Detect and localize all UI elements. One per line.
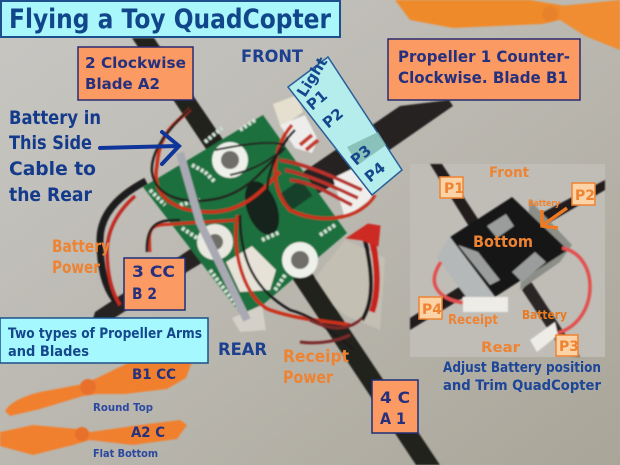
propeller labels: A2 C (131, 425, 165, 441)
black and red wires (100, 109, 380, 350)
inset arrow: battery (542, 208, 567, 228)
panel: propeller types heading: and Blades (8, 344, 89, 360)
inset tag: P3: P3 (559, 339, 579, 355)
label: battery power: Battery (52, 237, 110, 257)
inset tag: P1 (440, 177, 464, 198)
panel: propeller types heading: Two types of Propeller Arms (8, 326, 202, 342)
text block: battery note: Cable to (9, 158, 96, 180)
black chips (238, 177, 286, 239)
black propeller arm: top-left to bottom-right (132, 38, 440, 465)
white screw mount 2 (197, 224, 233, 260)
propeller labels: Flat Bottom (93, 447, 158, 460)
text block: battery note (9, 107, 101, 206)
callout: 3 CC B 2 (124, 258, 185, 310)
callout: 4 C A 1: 4 C (380, 388, 410, 407)
callout: 3 CC B 2: B 2 (132, 284, 157, 303)
callout: blade A2 (78, 47, 193, 100)
inset tag: P2 (572, 183, 595, 205)
label: receipt power: Receipt (283, 347, 349, 367)
inset tag: P2: P2 (575, 188, 595, 204)
white connectors (273, 95, 303, 128)
battery foam under board (310, 240, 385, 330)
rotated pin label panel (288, 54, 402, 195)
callout: propeller 1: Propeller 1 Counter- (398, 47, 570, 66)
callout: propeller 1 (388, 39, 580, 100)
label: REAR: REAR (218, 340, 267, 360)
callout: 4 C A 1 (372, 380, 418, 433)
label: battery power: Power (52, 258, 100, 278)
lower propeller type B1 CC (5, 362, 192, 416)
caption: adjust battery (443, 360, 601, 394)
circuit board (143, 95, 375, 332)
caption: adjust battery: and Trim QuadCopter (443, 378, 601, 394)
label: receipt power (283, 347, 349, 388)
inset label: Rear: Rear (481, 340, 520, 356)
propeller labels: Round Top (93, 401, 153, 414)
callout: 3 CC B 2: 3 CC (132, 262, 175, 281)
panel: propeller types heading (0, 318, 208, 363)
rotated pin label panel: P1 (303, 86, 331, 114)
rotated pin label panel: P2 (319, 104, 347, 132)
rotated pin label panel: P4 (361, 158, 389, 186)
white screw mount 1 (212, 142, 248, 178)
title banner: Flying a Toy QuadCopter (9, 4, 332, 35)
label: battery power (52, 237, 110, 278)
inset label: Battery: Battery (522, 308, 567, 322)
text block: battery note: This Side (9, 132, 92, 154)
inset photo: battery underside (410, 164, 605, 357)
propeller labels (93, 367, 176, 460)
label: FRONT: FRONT (241, 47, 303, 67)
inset label: small battery: Battery (528, 199, 560, 209)
text block: battery note: the Rear (9, 184, 93, 206)
lower propeller type A2 C (0, 420, 187, 455)
inset tag: P4 (419, 297, 442, 319)
text block: battery note: Battery in (9, 107, 101, 129)
rotated pin label panel: P3 (347, 141, 375, 169)
inset label: Receipt: Receipt (448, 313, 498, 328)
callout: propeller 1: Clockwise. Blade B1 (398, 68, 568, 87)
propeller labels: B1 CC (132, 367, 176, 383)
white silkscreen marks (150, 120, 335, 310)
inset label: Bottom: Bottom (473, 232, 533, 251)
arrow: battery side (100, 132, 179, 164)
inset tag: P1: P1 (444, 181, 464, 197)
label: receipt power: Power (283, 368, 334, 388)
white screw mount 3 (282, 242, 318, 278)
rotated pin label panel: Light (293, 54, 331, 100)
top-right orange propeller (395, 0, 620, 50)
callout: 4 C A 1: A 1 (380, 409, 406, 428)
black propeller arm: top-right to bottom-left (92, 100, 453, 322)
callout: blade A2: 2 Clockwise (85, 54, 186, 72)
callout: blade A2: Blade A2 (85, 75, 160, 93)
inset tag: P4: P4 (422, 302, 442, 318)
inset tag: P3 (556, 335, 579, 356)
inset label: Front: Front (489, 165, 529, 181)
